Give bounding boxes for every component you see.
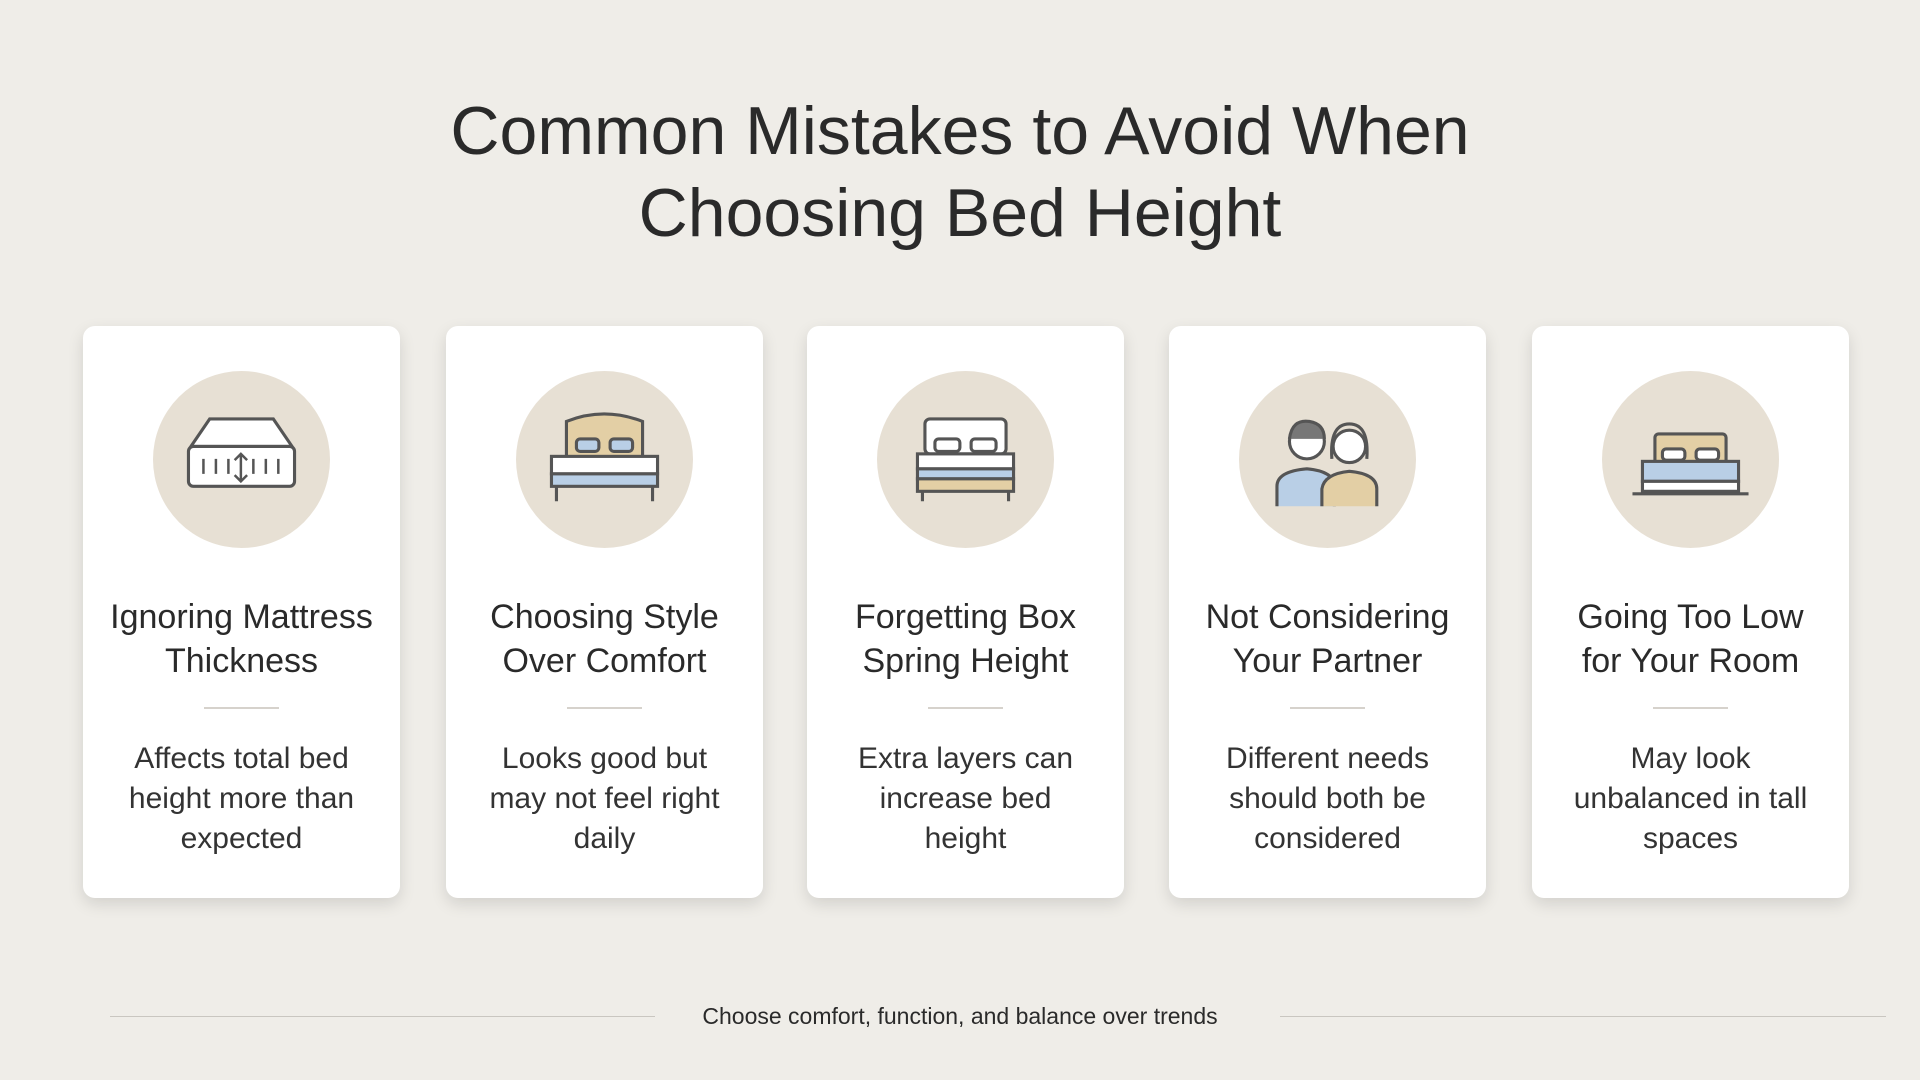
heading: Not Considering [1206, 598, 1449, 636]
heading: for Your Room [1582, 642, 1799, 680]
heading [855, 598, 1076, 680]
heading [1577, 598, 1804, 680]
icon: bed [516, 371, 693, 548]
title [450, 93, 1470, 251]
footer text: Choose comfort, function, and balance over trends [702, 1003, 1218, 1029]
heading: Your Partner [1233, 642, 1422, 680]
heading: Choosing Style [490, 598, 719, 636]
description: Affects total bed height more than expected [129, 742, 354, 855]
heading [490, 598, 719, 680]
description: Different needs should both be considered [1226, 742, 1429, 855]
heading: Going Too Low [1577, 598, 1804, 636]
description: Extra layers can increase bed height [858, 742, 1073, 855]
icon: low bed [1602, 371, 1779, 548]
card: box spring [807, 326, 1124, 898]
heading: Ignoring Mattress [110, 598, 373, 636]
title: Choosing Bed Height [639, 175, 1281, 251]
heading: Over Comfort [502, 642, 707, 680]
heading [1206, 598, 1449, 680]
heading: Forgetting Box [855, 598, 1076, 636]
card: style [446, 326, 763, 898]
description: May look unbalanced in tall spaces [1574, 742, 1807, 855]
icon: bed with box spring [877, 371, 1054, 548]
card: partner [1169, 326, 1486, 898]
icon: couple [1239, 371, 1416, 548]
heading: Thickness [165, 642, 318, 680]
heading [110, 598, 373, 680]
description: Looks good but may not feel right daily [489, 742, 720, 855]
card: too low [1532, 326, 1849, 898]
icon: mattress [153, 371, 330, 548]
card: mattress [83, 326, 400, 898]
heading: Spring Height [862, 642, 1068, 680]
title: Common Mistakes to Avoid When [450, 93, 1470, 169]
